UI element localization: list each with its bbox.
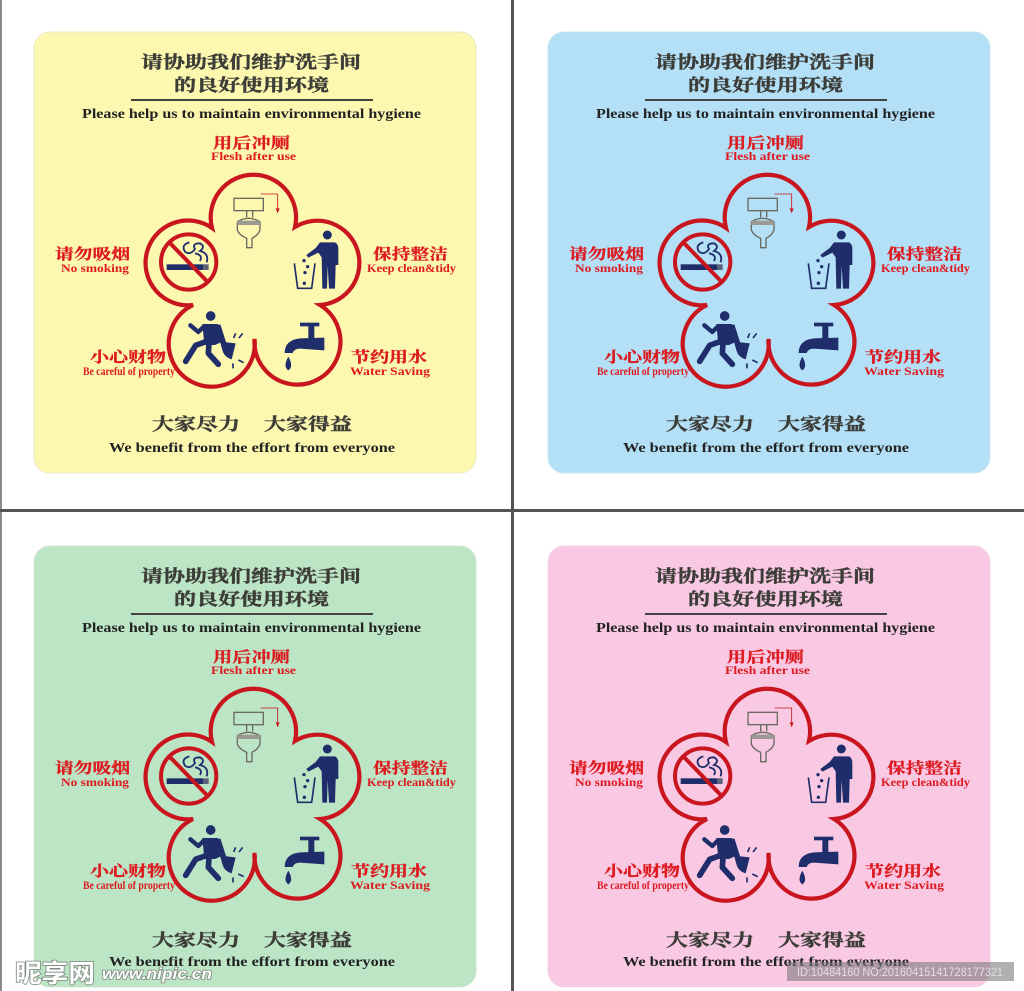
label: no smoking: 请勿吸烟	[55, 759, 130, 777]
label: water saving: 节约用水	[351, 862, 427, 880]
footer slogan: 大家尽力	[666, 930, 754, 950]
label: no smoking	[569, 245, 644, 275]
label: no smoking: No smoking	[575, 777, 643, 789]
label: flush: 用后冲厕	[213, 134, 290, 152]
label: water saving	[864, 862, 944, 892]
label: keep clean	[367, 759, 456, 789]
panel background	[34, 546, 476, 987]
footer slogan: 大家尽力	[152, 930, 240, 950]
label: no smoking: 请勿吸烟	[569, 759, 644, 777]
label: no smoking: 请勿吸烟	[55, 245, 130, 263]
footer slogan	[109, 930, 395, 970]
label: flush	[211, 134, 296, 163]
label: flush: 用后冲厕	[727, 648, 804, 666]
label: flush: Flesh after use	[211, 151, 296, 163]
label: flush	[725, 134, 810, 163]
icon: no smoking	[161, 234, 216, 290]
heading underline	[645, 613, 887, 615]
label: keep clean: Keep clean&tidy	[367, 777, 456, 789]
icon: litter bin	[808, 744, 852, 803]
heading: english title: Please help us to maintain environmental hygiene	[596, 621, 935, 636]
label: property: 小心财物	[90, 348, 166, 366]
heading: chinese title	[141, 52, 361, 95]
heading: chinese title: 请协助我们维护洗手间	[655, 566, 875, 586]
label: keep clean: 保持整洁	[887, 759, 962, 777]
heading: chinese title: 的良好使用环境	[688, 76, 843, 95]
flower outline	[146, 175, 359, 387]
footer slogan	[623, 414, 909, 456]
footer slogan	[623, 930, 909, 970]
label: water saving: Water Saving	[864, 366, 944, 378]
heading: chinese title	[655, 566, 875, 609]
heading: english title: Please help us to maintain environmental hygiene	[82, 621, 421, 636]
watermark: nipic logo: www.nipic.cn	[102, 966, 212, 983]
footer slogan: 大家尽力	[666, 414, 754, 434]
label: no smoking: No smoking	[575, 263, 643, 275]
label: no smoking	[55, 245, 130, 275]
heading: chinese title: 请协助我们维护洗手间	[141, 566, 361, 586]
icon: flush urinal	[748, 708, 794, 762]
heading: chinese title: 的良好使用环境	[688, 590, 843, 609]
footer slogan: 大家得益	[778, 930, 866, 950]
label: no smoking: No smoking	[61, 777, 129, 789]
heading: chinese title: 的良好使用环境	[174, 590, 329, 609]
footer slogan: 大家得益	[778, 414, 866, 434]
label: property	[597, 348, 689, 378]
footer slogan: We benefit from the effort from everyone	[623, 441, 909, 456]
label: flush: 用后冲厕	[213, 648, 290, 666]
footer slogan: We benefit from the effort from everyone	[109, 441, 395, 456]
label: flush	[211, 648, 296, 677]
heading: chinese title: 的良好使用环境	[174, 76, 329, 95]
footer slogan: 大家得益	[264, 414, 352, 434]
label: property: Be careful of property	[597, 880, 689, 892]
panel: blue sign	[548, 32, 990, 473]
footer slogan: We benefit from the effort from everyone	[109, 955, 395, 970]
label: property	[83, 862, 175, 892]
watermark: id bar: ID:10484160 NO:20160415141728177321	[797, 967, 1003, 979]
label: flush: Flesh after use	[725, 665, 810, 677]
label: property: Be careful of property	[597, 366, 689, 378]
icon: flush urinal	[234, 708, 280, 762]
heading: chinese title: 请协助我们维护洗手间	[655, 52, 875, 72]
label: keep clean	[367, 245, 456, 275]
label: water saving: 节约用水	[351, 348, 427, 366]
label: keep clean: 保持整洁	[373, 759, 448, 777]
label: property: 小心财物	[90, 862, 166, 880]
icon: no smoking	[675, 234, 730, 290]
panel: pink sign	[548, 546, 990, 987]
panel background	[548, 546, 990, 987]
icon: water tap	[799, 837, 838, 884]
heading: chinese title: 请协助我们维护洗手间	[141, 52, 361, 72]
heading: chinese title	[655, 52, 875, 95]
icon: litter bin	[808, 230, 852, 289]
label: property	[597, 862, 689, 892]
icon: careful of property	[700, 311, 758, 368]
label: water saving: Water Saving	[350, 366, 430, 378]
label: no smoking	[569, 759, 644, 789]
label: keep clean: 保持整洁	[887, 245, 962, 263]
label: keep clean	[881, 759, 970, 789]
label: flush: 用后冲厕	[727, 134, 804, 152]
label: property: Be careful of property	[83, 880, 175, 892]
heading underline	[131, 99, 373, 101]
heading: english title: Please help us to maintain environmental hygiene	[82, 107, 421, 122]
flower outline	[146, 689, 359, 901]
label: water saving: 节约用水	[865, 862, 941, 880]
footer slogan: 大家尽力	[152, 414, 240, 434]
heading: chinese title	[141, 566, 361, 609]
watermark: nipic logo	[15, 960, 212, 988]
icon: careful of property	[186, 825, 244, 882]
panel background	[548, 32, 990, 473]
panel background	[34, 32, 476, 473]
watermark: nipic logo: 昵享网	[15, 960, 95, 988]
label: water saving	[350, 862, 430, 892]
label: water saving	[350, 348, 430, 378]
heading: english title: Please help us to maintain environmental hygiene	[596, 107, 935, 122]
label: keep clean: 保持整洁	[373, 245, 448, 263]
label: water saving	[864, 348, 944, 378]
watermark: id bar	[787, 962, 1014, 981]
icon: water tap	[285, 837, 324, 884]
label: flush: Flesh after use	[211, 665, 296, 677]
footer slogan: 大家得益	[264, 930, 352, 950]
icon: litter bin	[294, 744, 338, 803]
icon: water tap	[799, 323, 838, 370]
label: no smoking: 请勿吸烟	[569, 245, 644, 263]
label: flush	[725, 648, 810, 677]
icon: careful of property	[700, 825, 758, 882]
footer slogan: We benefit from the effort from everyone	[623, 955, 909, 970]
icon: flush urinal	[234, 194, 280, 248]
label: water saving: Water Saving	[350, 880, 430, 892]
label: keep clean: Keep clean&tidy	[881, 263, 970, 275]
icon: no smoking	[161, 748, 216, 804]
label: property: 小心财物	[604, 862, 680, 880]
heading underline	[645, 99, 887, 101]
panel: green sign	[34, 546, 476, 987]
label: property: 小心财物	[604, 348, 680, 366]
icon: flush urinal	[748, 194, 794, 248]
label: keep clean: Keep clean&tidy	[367, 263, 456, 275]
label: no smoking	[55, 759, 130, 789]
flower outline	[660, 689, 873, 901]
label: property	[83, 348, 175, 378]
footer slogan	[109, 414, 395, 456]
label: property: Be careful of property	[83, 366, 175, 378]
panel: yellow sign	[34, 32, 476, 473]
label: no smoking: No smoking	[61, 263, 129, 275]
icon: water tap	[285, 323, 324, 370]
icon: careful of property	[186, 311, 244, 368]
label: keep clean: Keep clean&tidy	[881, 777, 970, 789]
icon: no smoking	[675, 748, 730, 804]
label: water saving: Water Saving	[864, 880, 944, 892]
heading underline	[131, 613, 373, 615]
icon: litter bin	[294, 230, 338, 289]
label: flush: Flesh after use	[725, 151, 810, 163]
label: keep clean	[881, 245, 970, 275]
label: water saving: 节约用水	[865, 348, 941, 366]
flower outline	[660, 175, 873, 387]
